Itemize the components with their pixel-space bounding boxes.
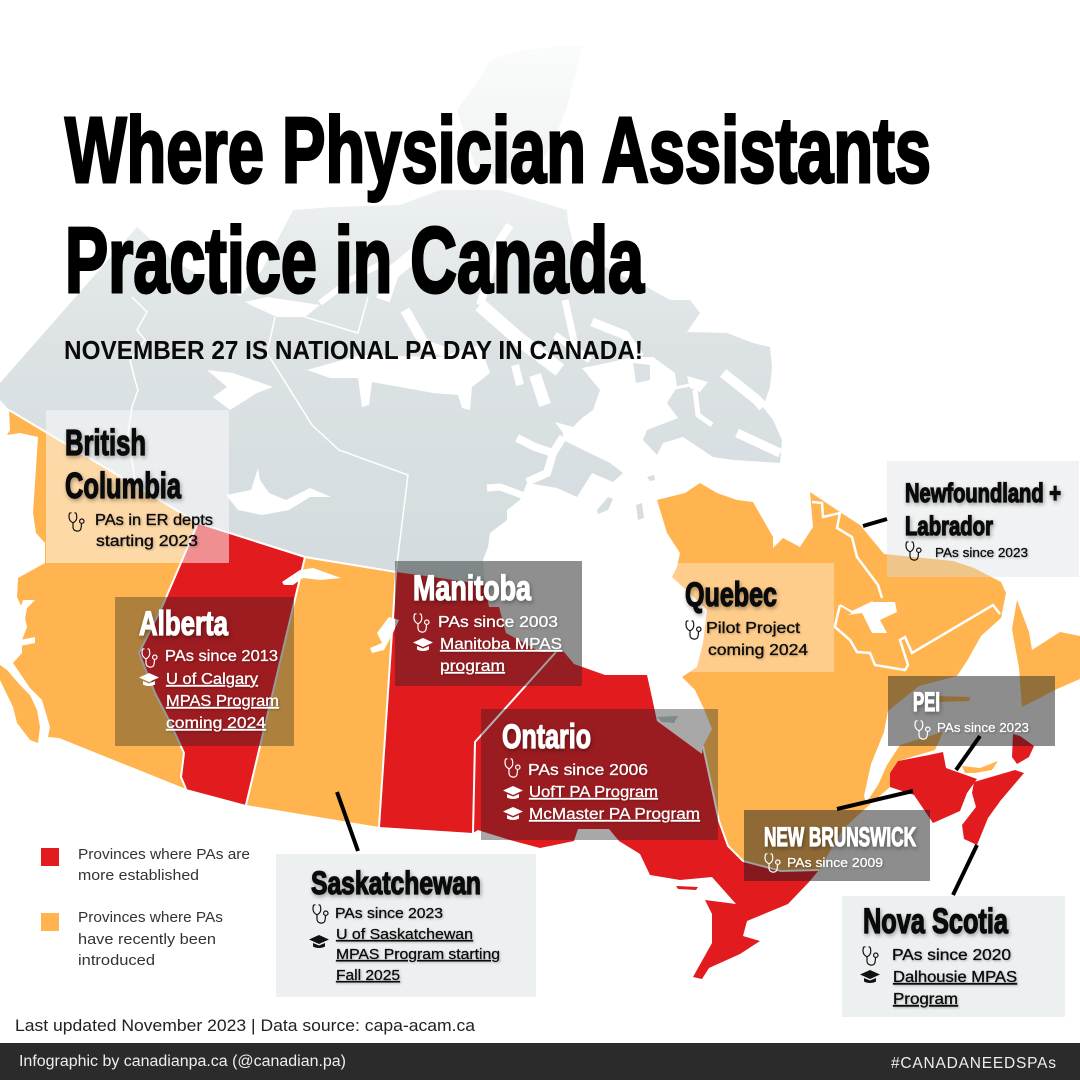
footer credit: Infographic by canadianpa.ca (@canadian.pa) bbox=[19, 1053, 346, 1070]
subtitle: NOVEMBER 27 IS NATIONAL PA DAY IN CANADA! bbox=[64, 335, 643, 365]
heading: British Columbia: British bbox=[65, 422, 146, 463]
heading: Ontario: Ontario bbox=[502, 718, 591, 756]
heading: Saskatchewan: Saskatchewan bbox=[311, 865, 481, 901]
heading: British Columbia bbox=[65, 422, 182, 506]
item: U of Saskatchewan program: U of Saskatchewan bbox=[336, 927, 473, 943]
panel: Ontario bbox=[481, 709, 718, 840]
legend item: recently introduced: Provinces where PAs bbox=[78, 909, 223, 926]
panel: Quebec bbox=[672, 563, 834, 672]
item: U of Calgary program: U of Calgary bbox=[166, 671, 258, 688]
item: U of Calgary program: coming 2024 bbox=[166, 715, 266, 732]
item: Dalhousie MPAS Program bbox=[860, 969, 1017, 1008]
item: PAs since 2009 bbox=[765, 854, 883, 872]
panel: British Columbia bbox=[46, 410, 229, 563]
legend item: recently introduced: introduced bbox=[78, 952, 155, 969]
item: PAs since 2013: PAs since 2013 bbox=[165, 648, 278, 665]
item: Manitoba MPAS program: program bbox=[440, 658, 505, 675]
footer hashtag: #CANADANEEDSPAs bbox=[891, 1055, 1056, 1072]
item: Dalhousie MPAS Program: Dalhousie MPAS bbox=[893, 969, 1017, 986]
title bbox=[64, 98, 931, 310]
heading: Quebec: Quebec bbox=[685, 576, 777, 614]
heading: Newfoundland + Labrador bbox=[905, 478, 1061, 541]
heading: British Columbia: Columbia bbox=[65, 465, 182, 506]
item: Manitoba MPAS program bbox=[413, 636, 562, 675]
panel: Saskatchewan bbox=[276, 854, 536, 997]
legend item: established bbox=[41, 846, 250, 884]
heading: Manitoba: Manitoba bbox=[413, 569, 531, 608]
item: ER depts: starting 2023 bbox=[96, 533, 198, 550]
heading: Alberta: Alberta bbox=[139, 605, 229, 643]
item: UofT PA Program: UofT PA Program bbox=[529, 784, 658, 801]
title: Practice in Canada bbox=[65, 208, 645, 310]
item: U of Calgary program: MPAS Program bbox=[166, 693, 279, 710]
panel: Nova Scotia bbox=[842, 896, 1065, 1017]
item: PAs since 2009: PAs since 2009 bbox=[787, 855, 883, 870]
legend item: recently introduced: have recently been bbox=[78, 931, 216, 948]
last updated note: Last updated November 2023 | Data source: capa-acam.ca bbox=[15, 1017, 476, 1035]
item: ER depts bbox=[69, 512, 213, 550]
panel: PEI bbox=[888, 676, 1055, 746]
item: ER depts: PAs in ER depts bbox=[95, 512, 213, 529]
item: PAs since 2023 bbox=[906, 542, 1028, 560]
item: Pilot Project bbox=[686, 620, 808, 659]
item: PAs since 2023 bbox=[915, 720, 1029, 739]
item: PAs since 2006 bbox=[505, 759, 648, 779]
item: PAs since 2023: PAs since 2023 bbox=[335, 906, 443, 922]
panel: Newfoundland and Labrador bbox=[887, 461, 1079, 577]
panel: Alberta bbox=[115, 597, 294, 746]
heading: PEI: PEI bbox=[913, 687, 940, 717]
legend bbox=[41, 846, 250, 969]
item: McMaster PA Program: McMaster PA Program bbox=[529, 806, 700, 823]
panel: Manitoba bbox=[395, 561, 582, 686]
item: Pilot Project: Pilot Project bbox=[706, 620, 801, 637]
footer bar bbox=[0, 1043, 1080, 1080]
item: Pilot Project: coming 2024 bbox=[708, 642, 808, 659]
item: Manitoba MPAS program: Manitoba MPAS bbox=[440, 636, 562, 653]
item: PAs since 2023: PAs since 2023 bbox=[937, 720, 1029, 735]
item: PAs since 2003: PAs since 2003 bbox=[438, 614, 558, 631]
item: PAs since 2023 bbox=[313, 905, 443, 923]
item: U of Saskatchewan program: MPAS Program starting bbox=[336, 947, 500, 963]
item: PAs since 2023: PAs since 2023 bbox=[935, 545, 1028, 560]
item: PAs since 2020 bbox=[863, 947, 1011, 965]
item: PAs since 2003 bbox=[414, 614, 558, 632]
heading: Nova Scotia: Nova Scotia bbox=[863, 902, 1008, 941]
item: PAs since 2020: PAs since 2020 bbox=[892, 947, 1011, 964]
item: U of Calgary program bbox=[139, 671, 279, 732]
item: Dalhousie MPAS Program: Program bbox=[893, 991, 958, 1008]
legend item: established: more established bbox=[78, 867, 199, 884]
item: PAs since 2013 bbox=[142, 648, 278, 667]
item: U of Saskatchewan program bbox=[309, 927, 500, 984]
item: U of Saskatchewan program: Fall 2025 bbox=[336, 968, 400, 984]
item: PAs since 2006: PAs since 2006 bbox=[528, 762, 648, 779]
panel: New Brunswick bbox=[744, 810, 930, 881]
legend item: recently introduced bbox=[41, 909, 223, 969]
heading: Newfoundland + Labrador: Labrador bbox=[905, 511, 993, 541]
legend item: established: Provinces where PAs are bbox=[78, 846, 250, 863]
